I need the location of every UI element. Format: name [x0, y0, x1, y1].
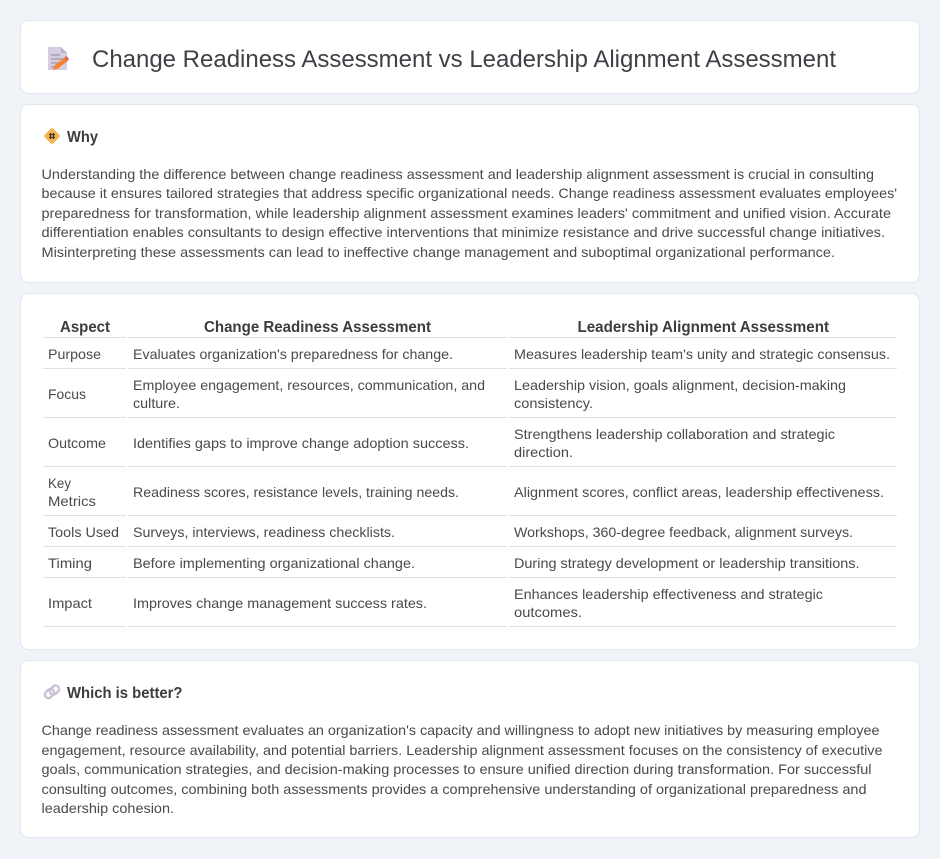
row: impact: [48, 586, 823, 620]
row: outcome: Identifies gaps to improve change adoption success.: [133, 435, 469, 451]
text block: which is better paragraph: Change readiness assessment evaluates an organization's capacity and willingness to adopt new initiatives by measuring employee: [42, 722, 880, 738]
panel: header: [20, 20, 920, 94]
row: key metrics: Readiness scores, resistance levels, training needs.: [133, 484, 459, 500]
row: purpose: Measures leadership team's unity and strategic consensus.: [514, 346, 890, 362]
icon: warning diamond: [44, 128, 60, 144]
row: key metrics: Alignment scores, conflict areas, leadership effectiveness.: [514, 484, 884, 500]
row: tools used: Tools Used: [48, 524, 119, 540]
row: timing: Timing: [48, 555, 92, 571]
table header row: Leadership Alignment Assessment: [578, 319, 830, 336]
row: tools used: [48, 524, 853, 540]
row: focus: culture.: [133, 395, 180, 411]
text block: why paragraph: [42, 166, 897, 260]
text block: which is better paragraph: consulting outcomes, combining both assessments provides a comprehensive understanding of organizational preparedness and: [42, 781, 866, 797]
row: impact: outcomes.: [514, 604, 582, 620]
table header row: Change Readiness Assessment: [204, 319, 432, 336]
table header row: [60, 319, 830, 336]
row: key metrics: Key: [48, 475, 71, 491]
row: purpose: Purpose: [48, 346, 101, 362]
row: outcome: Strengthens leadership collaboration and strategic: [514, 426, 835, 442]
table header row: Aspect: [60, 319, 111, 336]
row: tools used: Surveys, interviews, readiness checklists.: [133, 524, 395, 540]
heading: which is better: Which is better?: [67, 685, 182, 702]
text block: why paragraph: because it ensures tailored strategies that address specific organizational needs. Change readiness assessment evaluates employees': [42, 185, 897, 201]
icon: chain link: [43, 684, 61, 700]
row: tools used: Workshops, 360-degree feedback, alignment surveys.: [514, 524, 853, 540]
text block: which is better paragraph: engagement, resource availability, and potential barriers. Leadership alignment assessment focuses on the consistency of executive: [42, 742, 883, 758]
text block: which is better paragraph: [42, 722, 883, 816]
row: impact: Enhances leadership effectiveness and strategic: [514, 586, 823, 602]
row: purpose: [48, 346, 890, 362]
row: impact: Improves change management success rates.: [133, 595, 427, 611]
text block: why paragraph: Understanding the difference between change readiness assessment and leadership alignment assessment is crucial in consulting: [42, 166, 874, 182]
row: timing: [48, 555, 860, 571]
heading: why: Why: [67, 129, 98, 146]
text block: which is better paragraph: goals, communication strategies, and decision-making processes to ensure unified direction during transformation. For successful: [42, 761, 872, 777]
row: outcome: [48, 426, 835, 460]
row: timing: During strategy development or leadership transitions.: [514, 555, 860, 571]
text block: which is better paragraph: leadership cohesion.: [42, 800, 174, 816]
row: timing: Before implementing organizational change.: [133, 555, 415, 571]
row: focus: consistency.: [514, 395, 593, 411]
row: focus: [48, 377, 846, 411]
row: outcome: Outcome: [48, 435, 106, 451]
panel: which is better: [20, 660, 920, 838]
row: focus: Employee engagement, resources, communication, and: [133, 377, 485, 393]
row: impact: Impact: [48, 595, 92, 611]
title: Change Readiness Assessment vs Leadership Alignment Assessment: [92, 46, 836, 73]
row: focus: Leadership vision, goals alignment, decision-making: [514, 377, 846, 393]
row: outcome: direction.: [514, 444, 573, 460]
text block: why paragraph: Misinterpreting these assessments can lead to ineffective change management and suboptimal organizational performance.: [42, 244, 835, 260]
panel: comparison table: [20, 294, 920, 650]
row: focus: Focus: [48, 386, 86, 402]
row: purpose: Evaluates organization's preparedness for change.: [133, 346, 453, 362]
panel: why: [20, 104, 920, 282]
text block: why paragraph: preparedness for transformation, while leadership alignment assessment examines leaders' commitment and unified vision. Accurate: [42, 205, 891, 221]
icon: document with pencil: [48, 47, 69, 70]
text block: why paragraph: differentiation enables consultants to design effective interventions that minimize resistance and drive successful change initiatives.: [42, 224, 885, 240]
row: key metrics: [48, 475, 884, 509]
row: key metrics: Metrics: [48, 493, 96, 509]
